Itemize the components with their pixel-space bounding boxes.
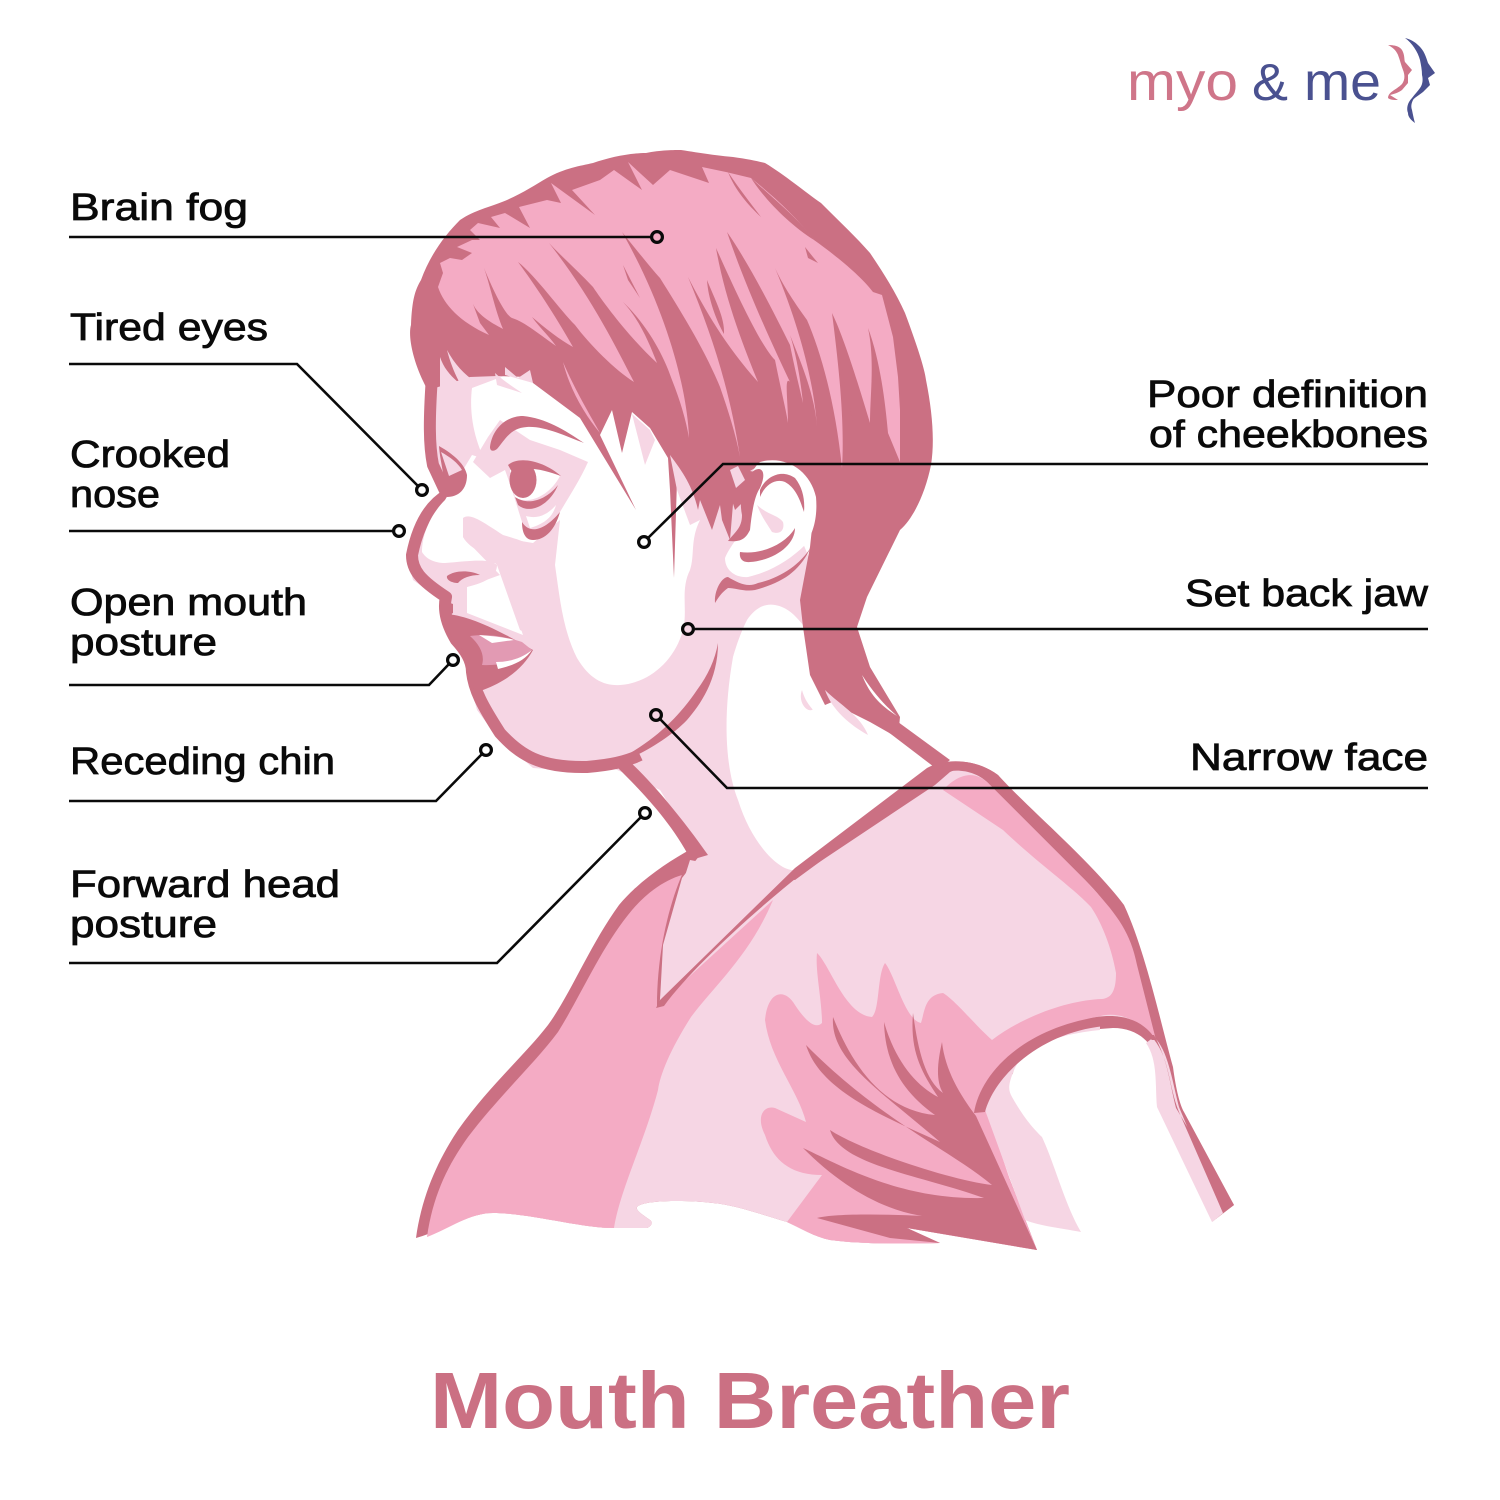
jaw line — [625, 643, 718, 760]
illustration: mouth breather profile — [69, 150, 1428, 1250]
torso — [416, 762, 1234, 1250]
label: tired eyes: Tired eyes — [70, 307, 268, 349]
hair dark slivers — [623, 172, 853, 422]
callout leader lines — [69, 232, 1428, 963]
neck and face base — [407, 360, 1010, 1008]
lapel line — [657, 868, 685, 1006]
label: set back jaw: Set back jaw — [1185, 573, 1429, 615]
label: forward head posture: posture — [70, 904, 217, 946]
label: narrow face: Narrow face — [1190, 737, 1428, 779]
leader: receding chin — [69, 745, 491, 801]
ear — [715, 460, 816, 603]
eye socket patch — [473, 420, 588, 540]
shoulder band — [761, 775, 1156, 1250]
sleeve dark arc — [974, 1016, 1156, 1113]
eye — [508, 460, 561, 540]
white nose and upper lip — [422, 455, 560, 635]
face outline — [412, 376, 640, 767]
logo wordmark: & — [1252, 54, 1288, 112]
title: Mouth Breather — [430, 1356, 1070, 1445]
leader: tired eyes — [69, 364, 427, 495]
logo icon: two faces — [1388, 38, 1435, 123]
label: poor definition of cheekbones: Poor definition — [1147, 374, 1428, 416]
light philtrum — [453, 586, 467, 615]
logo — [1127, 38, 1435, 123]
hair fringe wisps — [440, 350, 897, 735]
mouth — [441, 600, 533, 690]
underarm light — [985, 1026, 1100, 1232]
label: open mouth posture: posture — [70, 622, 217, 664]
label: poor definition of cheekbones: of cheekbones — [1149, 414, 1428, 456]
hair mid highlight — [438, 162, 900, 468]
label: receding chin: Receding chin — [70, 741, 335, 783]
V neckline strip — [656, 761, 1010, 1008]
white cheek — [471, 370, 700, 685]
hair — [410, 150, 933, 738]
white neck — [727, 605, 940, 870]
label: brain fog: Brain fog — [70, 187, 248, 229]
nostril — [447, 571, 480, 583]
label: forward head posture — [70, 864, 340, 946]
label: open mouth posture: Open mouth — [70, 582, 307, 624]
light nose side — [422, 552, 497, 587]
label: crooked nose — [70, 434, 230, 516]
front neck line — [618, 760, 708, 860]
leader: brain fog — [69, 232, 662, 242]
leaf print — [803, 1013, 1037, 1250]
leader: crooked nose — [69, 526, 404, 536]
arm light strip — [1146, 1037, 1223, 1222]
logo wordmark: myo — [1127, 52, 1238, 112]
logo wordmark — [1127, 52, 1381, 112]
label: crooked nose: nose — [70, 474, 160, 516]
back of neck line — [862, 700, 950, 770]
leader: forward head posture — [69, 808, 650, 963]
upper lip shadow — [441, 600, 453, 620]
leader: open mouth posture — [69, 655, 458, 685]
label: forward head posture: Forward head — [70, 864, 340, 906]
far eye — [439, 446, 467, 497]
leader: poor definition of cheekbones — [639, 464, 1428, 547]
white arm — [1011, 1028, 1223, 1250]
hair dark mass — [410, 150, 933, 738]
face highlights — [422, 370, 700, 685]
leader: narrow face — [651, 710, 1428, 788]
label: open mouth posture — [70, 582, 307, 664]
leader: set back jaw — [683, 624, 1428, 634]
light cheek patch — [463, 516, 563, 640]
torso light fill — [427, 771, 1154, 1250]
label: poor definition of cheekbones — [1147, 374, 1428, 456]
logo wordmark: me — [1304, 52, 1381, 112]
label: crooked nose: Crooked — [70, 434, 230, 476]
eyebrow — [490, 416, 584, 451]
left panel of top — [427, 875, 773, 1237]
arm dark cuff — [1150, 1035, 1234, 1213]
